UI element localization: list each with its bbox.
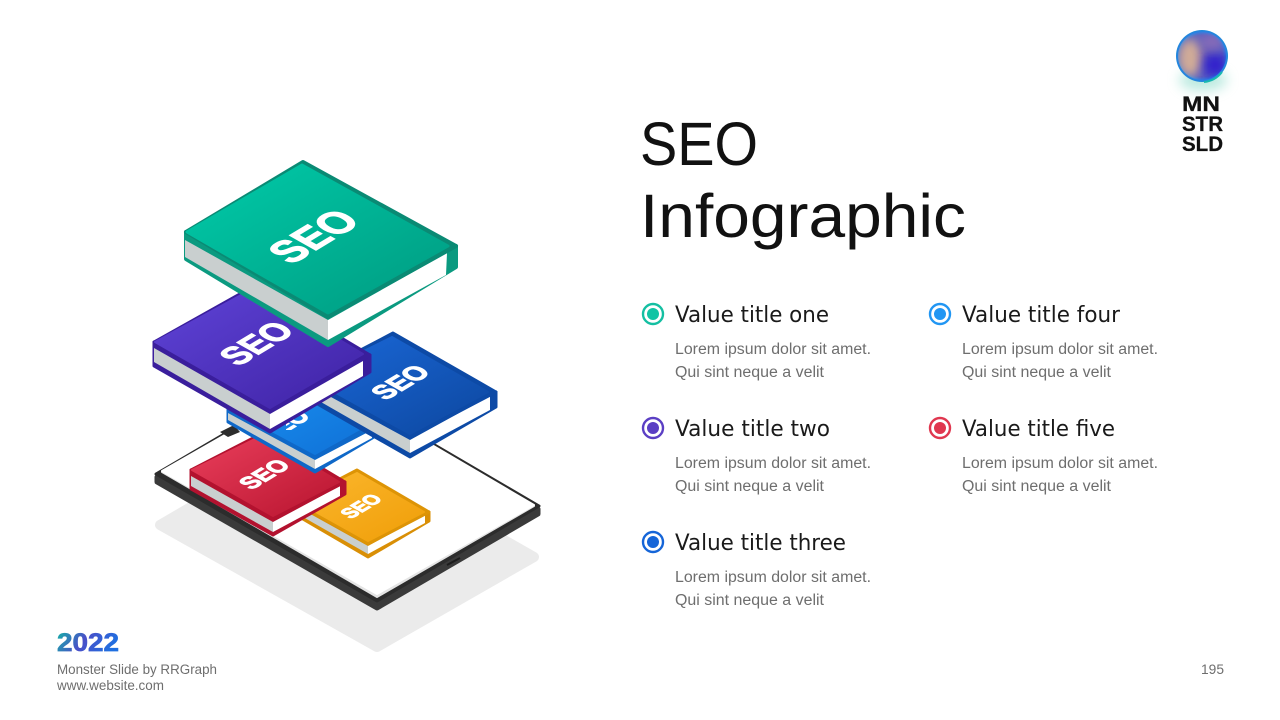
footer: credits: [56, 662, 217, 693]
value item one: Qui sint neque a velit: [675, 364, 825, 381]
value item five: Value title five: [962, 417, 1115, 442]
value item four: Lorem ipsum dolor sit amet.: [962, 341, 1158, 358]
value item three: Qui sint neque a velit: [675, 592, 825, 609]
icon: light blue bullet: [930, 304, 950, 324]
book: purple SEO: SEO: [209, 316, 303, 371]
illustration: stacked SEO books on tablet: [154, 162, 539, 647]
value item three: Lorem ipsum dolor sit amet.: [675, 569, 871, 586]
value item three: [643, 531, 871, 609]
value item four: Value title four: [962, 303, 1121, 328]
icon: purple bullet: [643, 418, 663, 438]
icon: teal bullet: [643, 304, 663, 324]
logo: STR: [1182, 113, 1223, 136]
footer: year: 2022: [57, 629, 119, 657]
value item four: [930, 303, 1158, 381]
logo: MN: [1182, 93, 1220, 116]
value item two: Value title two: [675, 417, 830, 442]
value item one: Value title one: [675, 303, 829, 328]
logo: [1176, 30, 1228, 156]
logo: SLD: [1182, 133, 1223, 156]
value item five: Lorem ipsum dolor sit amet.: [962, 455, 1158, 472]
book: dark blue SEO: SEO: [364, 361, 437, 404]
icon: red bullet: [930, 418, 950, 438]
value item three: Value title three: [675, 531, 846, 556]
book: teal SEO: SEO: [257, 203, 371, 270]
book: red SEO: SEO: [233, 456, 297, 493]
value item five: [930, 417, 1158, 495]
book: light blue SEO: [226, 406, 374, 474]
tablet shadow: [160, 433, 534, 647]
value item four: Qui sint neque a velit: [962, 364, 1112, 381]
book: orange SEO: SEO: [336, 491, 388, 522]
value item two: [643, 417, 871, 495]
icon: blue bullet: [643, 532, 663, 552]
tablet: [156, 378, 539, 608]
title: SEO: [640, 110, 758, 178]
page number: 195: [1201, 661, 1224, 677]
value item one: Lorem ipsum dolor sit amet.: [675, 341, 871, 358]
value item two: Qui sint neque a velit: [675, 478, 825, 495]
value item one: [643, 303, 871, 381]
title: Infographic: [640, 182, 966, 250]
book: light blue SEO: SEO: [253, 407, 317, 444]
footer: credits: Monster Slide by RRGraph: [57, 662, 217, 677]
value item five: Qui sint neque a velit: [962, 478, 1112, 495]
book: teal SEO: [185, 162, 456, 345]
footer: credits: www.website.com: [56, 678, 164, 693]
book: dark blue SEO: [307, 333, 496, 457]
value item two: Lorem ipsum dolor sit amet.: [675, 455, 871, 472]
title: [640, 110, 966, 250]
book: red SEO: [191, 433, 345, 535]
book: purple SEO: [154, 286, 370, 432]
book: orange SEO: [296, 470, 429, 557]
